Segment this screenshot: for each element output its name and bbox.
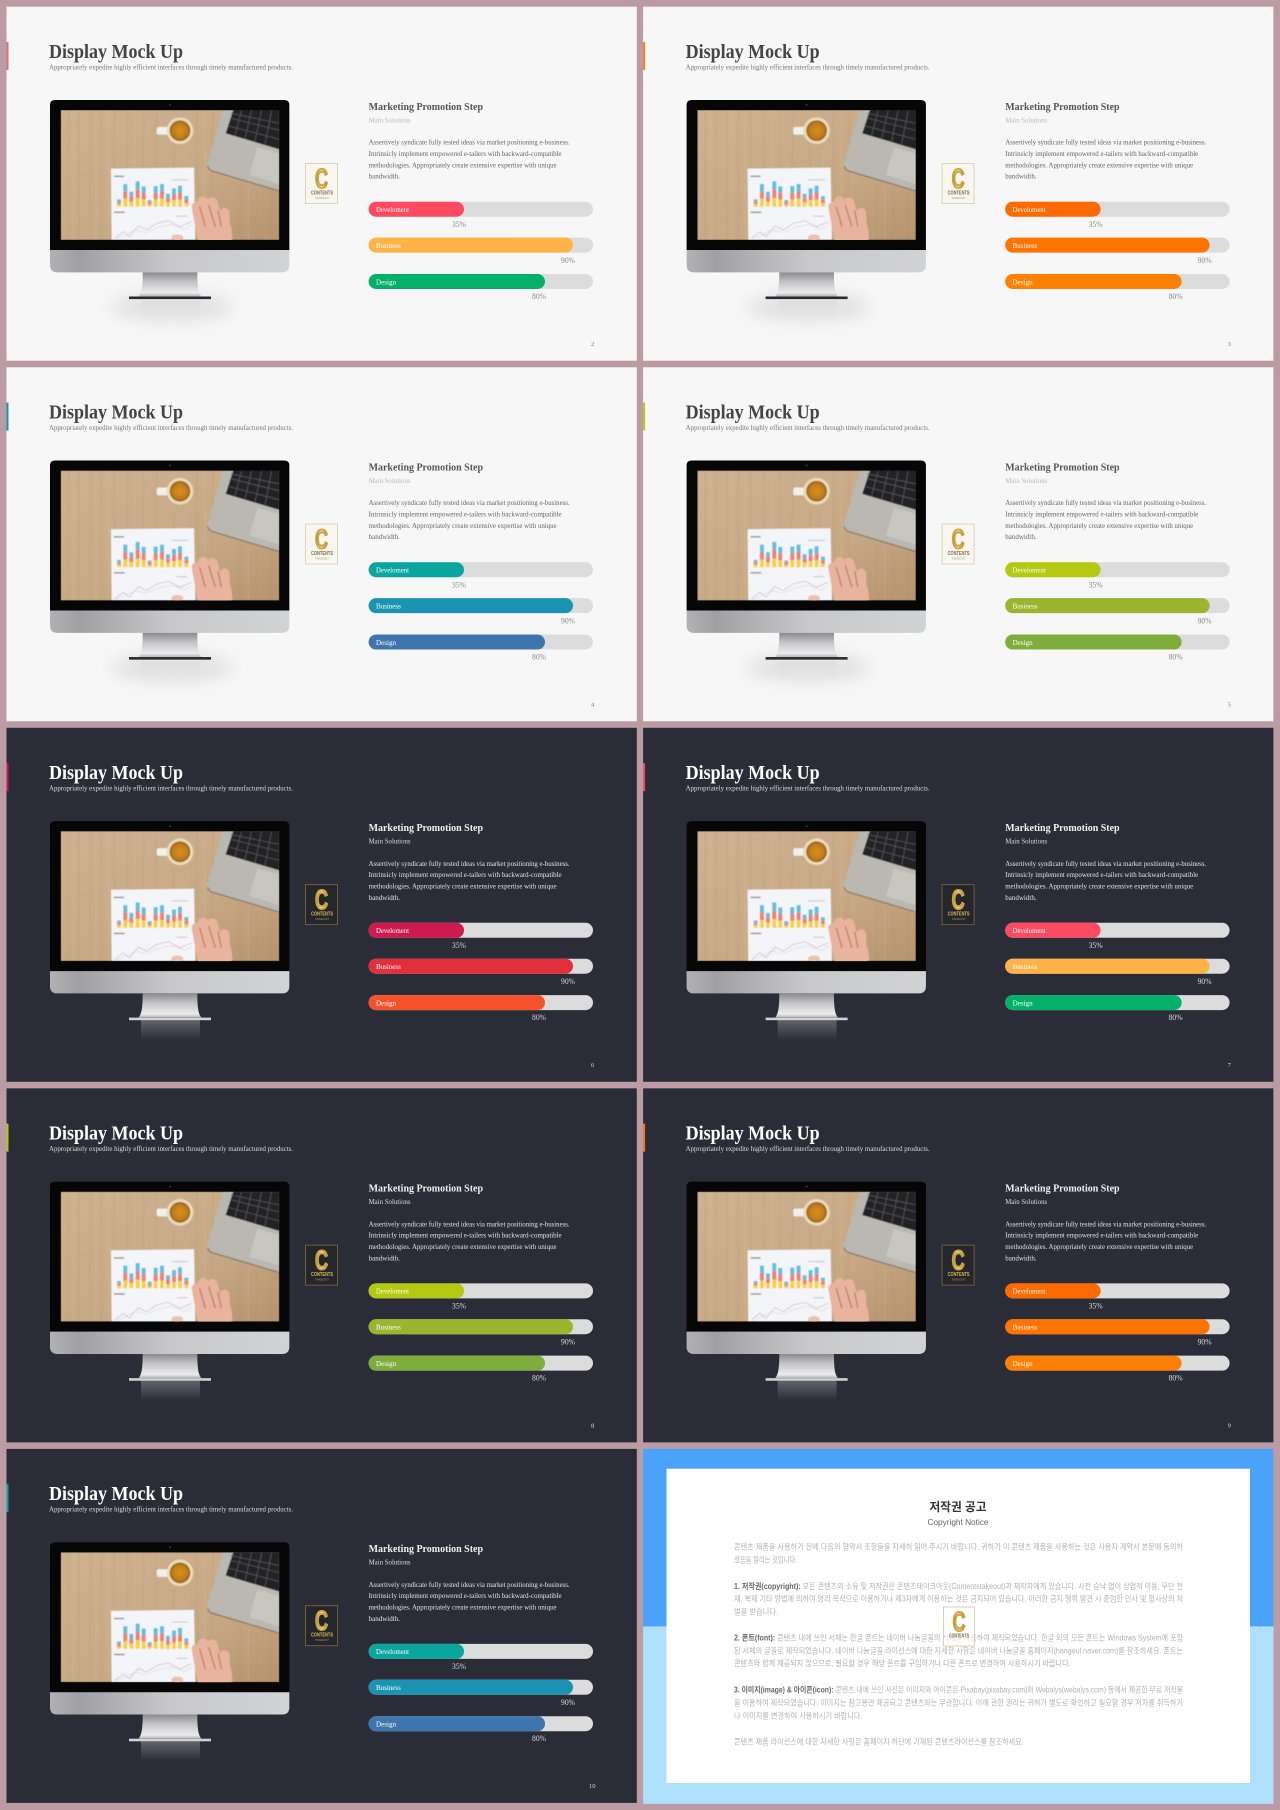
- body text: Assertively syndicate fully tested ideas via market positioning e-business.: [1005, 1219, 1206, 1228]
- sub heading: Main Solutions: [369, 837, 411, 846]
- progress bar: design 80%: 80%: [532, 653, 546, 662]
- body text: Intrinsicly implement empowered e-tailers with backward-compatible: [1005, 149, 1199, 158]
- accent bar: [6, 403, 8, 431]
- progress bar: design 80%: [369, 635, 593, 662]
- progress bar: design 80%: 80%: [532, 1734, 546, 1743]
- notice body text: 2. 폰트(font): 콘텐츠 내에 쓰인 서체는 한글 폰트는 네이버 나눔글꼴의 서체를 사용하여 제작되었습니다. 한글 외의 모든 폰트는 Windows System에 포함: [734, 1633, 1183, 1643]
- progress bar: business 90%: Business: [1013, 241, 1037, 250]
- body text: bandwidth.: [369, 532, 400, 541]
- progress bar: business 90%: 90%: [561, 1698, 575, 1707]
- body text: Assertively syndicate fully tested ideas via market positioning e-business.: [369, 1219, 570, 1228]
- progress bar: design 80%: Design: [1013, 638, 1033, 647]
- progress bar: development 35%: Develoment: [1013, 566, 1046, 575]
- heading: Marketing Promotion Step: [1005, 463, 1120, 474]
- body text: Assertively syndicate fully tested ideas via market positioning e-business.: [1005, 138, 1206, 147]
- progress bar: development 35%: 35%: [452, 1662, 466, 1671]
- monitor mockup: [50, 821, 289, 1040]
- subtitle: Appropriately expedite highly efficient interfaces through timely manufactured products.: [686, 1145, 930, 1153]
- heading: Marketing Promotion Step: [369, 823, 483, 834]
- body text: Intrinsicly implement empowered e-tailers with backward-compatible: [369, 1591, 562, 1600]
- progress bar: development 35%: Develoment: [1013, 926, 1046, 935]
- subtitle: Appropriately expedite highly efficient interfaces through timely manufactured products.: [49, 1506, 293, 1514]
- progress bar: business 90%: [1005, 1319, 1230, 1347]
- page number: 5: [1228, 702, 1231, 709]
- logo badge: [306, 1245, 338, 1285]
- body text: bandwidth.: [369, 1253, 400, 1262]
- body text: Intrinsicly implement empowered e-tailers with backward-compatible: [369, 1231, 562, 1240]
- progress bar: development 35%: Develoment: [376, 1287, 410, 1296]
- monitor mockup: [50, 1542, 289, 1761]
- accent bar: [643, 1124, 645, 1152]
- body text: [369, 1219, 570, 1262]
- progress bar: business 90%: [369, 238, 593, 265]
- logo badge: [942, 1245, 974, 1285]
- progress bar: design 80%: Design: [376, 1359, 396, 1368]
- body text: methodologies. Appropriately create extensive expertise with unique: [1005, 1242, 1194, 1251]
- body text: methodologies. Appropriately create extensive expertise with unique: [369, 882, 557, 891]
- sub heading: Main Solutions: [1005, 1197, 1047, 1206]
- progress bar: design 80%: [369, 1356, 593, 1383]
- accent bar: [6, 1124, 8, 1152]
- progress bar: business 90%: [369, 959, 593, 986]
- progress bar: business 90%: 90%: [561, 977, 575, 986]
- notice body text: 된 서체의 글꼴로 제작되었습니다. 네이버 나눔글꼴 라이선스에 대한 자세한 사항은 네이버 나눔글꼴 홈페이지(hangeul.naver.com)를 참조하세요. 폰트는: [734, 1646, 1183, 1656]
- progress bar: business 90%: Business: [1013, 962, 1037, 971]
- body text: methodologies. Appropriately create extensive expertise with unique: [369, 521, 557, 530]
- progress bar: development 35%: 35%: [452, 941, 466, 950]
- progress bar: business 90%: Business: [1013, 602, 1037, 611]
- accent bar: [6, 1484, 8, 1512]
- progress bar: business 90%: 90%: [561, 617, 575, 626]
- heading: Marketing Promotion Step: [369, 463, 483, 474]
- notice body text: 나 이미지를 변경하여 사용하시기 바랍니다.: [734, 1711, 862, 1721]
- sub heading: Main Solutions: [369, 476, 411, 485]
- monitor mockup: [50, 1182, 289, 1401]
- notice body text: 재, 복제 기타 방법에 의하여 영리 목적으로 이용하거나 제3자에게 이용하는 것은 금지되어 있습니다. 이러한 금지 행위 발견 시 준엄한 민사 및 형사상의 처: [734, 1594, 1183, 1604]
- heading: Marketing Promotion Step: [1005, 823, 1120, 834]
- heading: Marketing Promotion Step: [1005, 1184, 1120, 1195]
- logo badge: [944, 1606, 974, 1646]
- panel: copyright notice: [643, 1449, 1274, 1804]
- sub heading: Main Solutions: [369, 116, 411, 124]
- progress bar: development 35%: [1005, 923, 1230, 950]
- progress bar: design 80%: [369, 1716, 593, 1743]
- accent bar: [643, 42, 645, 70]
- notice body text: 벌을 받습니다.: [734, 1607, 778, 1617]
- progress bar: development 35%: Develoment: [376, 926, 410, 935]
- panel: slide 3: [643, 7, 1273, 361]
- panel: slide 10: [6, 1449, 637, 1803]
- page number: 3: [1228, 341, 1231, 348]
- accent bar: [6, 763, 8, 791]
- body text: bandwidth.: [369, 1614, 400, 1623]
- logo badge: [306, 884, 338, 925]
- sub heading: Main Solutions: [369, 1197, 411, 1206]
- panel: slide 4: [6, 367, 637, 721]
- progress bar: development 35%: 35%: [1089, 581, 1103, 590]
- accent bar: [643, 763, 645, 791]
- panel: slide 8: [6, 1088, 637, 1442]
- notice body text: 1. 저작권(copyright): 모든 콘텐츠의 소유 및 저작권은 콘텐츠테이크아웃(Contentstakeout)과 제작자에게 있습니다. 사전 승낙 없이 상업적 이용, 무단 전: [734, 1581, 1183, 1591]
- title: Display Mock Up: [686, 762, 820, 784]
- title: Display Mock Up: [49, 1483, 183, 1505]
- progress bar: design 80%: 80%: [1169, 1374, 1183, 1383]
- monitor mockup: [687, 821, 926, 1040]
- progress bar: design 80%: 80%: [532, 1013, 546, 1022]
- subtitle: Appropriately expedite highly efficient interfaces through timely manufactured products.: [49, 424, 293, 432]
- notice subtitle: Copyright Notice: [928, 1517, 989, 1527]
- sub heading: Main Solutions: [1005, 116, 1047, 124]
- monitor mockup: [50, 461, 289, 684]
- body text: Assertively syndicate fully tested ideas via market positioning e-business.: [369, 138, 570, 147]
- notice body text: 3. 이미지(image) & 아이콘(icon): 콘텐츠 내에 쓰인 사진은 이미지와 아이콘은 Pixabay(pixabay.com)와 Webalys(webalys.com) 등에서 제공한 무료 저작물: [734, 1685, 1183, 1695]
- progress bar: design 80%: Design: [376, 1720, 396, 1729]
- body text: Assertively syndicate fully tested ideas via market positioning e-business.: [1005, 859, 1206, 868]
- notice body text: [734, 1542, 1183, 1747]
- body text: Intrinsicly implement empowered e-tailers with backward-compatible: [369, 870, 562, 879]
- progress bar: business 90%: 90%: [1198, 256, 1212, 265]
- progress bar: design 80%: Design: [376, 278, 396, 286]
- progress bar: development 35%: 35%: [1089, 220, 1103, 229]
- body text: Assertively syndicate fully tested ideas via market positioning e-business.: [369, 498, 570, 507]
- progress bar: development 35%: [1005, 1283, 1230, 1311]
- body text: [369, 498, 570, 541]
- progress bar: business 90%: 90%: [561, 256, 575, 265]
- body text: bandwidth.: [1005, 532, 1037, 541]
- subtitle: Appropriately expedite highly efficient interfaces through timely manufactured products.: [49, 64, 293, 72]
- sub heading: Main Solutions: [1005, 837, 1047, 846]
- logo badge: [306, 524, 338, 564]
- progress bar: design 80%: [369, 995, 593, 1022]
- sub heading: Main Solutions: [369, 1558, 411, 1567]
- progress bar: design 80%: Design: [1013, 1359, 1033, 1368]
- progress bar: development 35%: 35%: [452, 220, 466, 229]
- title: Display Mock Up: [686, 402, 820, 424]
- page number: 4: [591, 702, 595, 709]
- progress bar: design 80%: Design: [376, 999, 396, 1008]
- body text: methodologies. Appropriately create extensive expertise with unique: [369, 160, 557, 170]
- body text: Intrinsicly implement empowered e-tailers with backward-compatible: [369, 510, 562, 519]
- logo badge: [942, 884, 974, 925]
- body text: bandwidth.: [369, 172, 400, 181]
- body text: Intrinsicly implement empowered e-tailers with backward-compatible: [369, 149, 562, 158]
- body text: [369, 859, 570, 902]
- body text: [1005, 138, 1206, 181]
- progress bar: development 35%: Develoment: [376, 205, 410, 214]
- sub heading: Main Solutions: [1005, 476, 1047, 485]
- title: Display Mock Up: [686, 1123, 820, 1145]
- progress bar: development 35%: [369, 562, 593, 590]
- panel: slide 2: [6, 7, 637, 361]
- body text: Intrinsicly implement empowered e-tailers with backward-compatible: [1005, 870, 1199, 879]
- progress bar: development 35%: [369, 923, 593, 950]
- monitor mockup: [687, 1182, 926, 1401]
- progress bar: business 90%: [1005, 959, 1230, 986]
- heading: Marketing Promotion Step: [369, 1184, 483, 1195]
- logo badge: C: [952, 1606, 966, 1637]
- body text: Intrinsicly implement empowered e-tailers with backward-compatible: [1005, 510, 1199, 519]
- progress bar: development 35%: Develoment: [1013, 205, 1046, 214]
- progress bar: development 35%: [369, 1283, 593, 1311]
- progress bar: business 90%: [369, 1680, 593, 1707]
- white notice card: [666, 1469, 1250, 1783]
- progress bar: design 80%: [369, 274, 593, 301]
- notice title: 저작권 공고: [930, 1499, 986, 1514]
- progress bar: business 90%: Business: [376, 1323, 401, 1332]
- body text: Intrinsicly implement empowered e-tailers with backward-compatible: [1005, 1231, 1199, 1240]
- notice body text: 콘텐츠 제품을 사용하기 전에 다음의 협약서 조항들을 자세히 읽어 주시기 바랍니다. 귀하가 이 콘텐츠 제품을 사용하는 것은 사용자 계약서 본문에 동의하: [734, 1542, 1183, 1552]
- page number: 6: [591, 1062, 595, 1069]
- panel: slide 6: [6, 728, 637, 1082]
- progress bar: business 90%: [369, 1319, 593, 1347]
- page number: 9: [1228, 1423, 1231, 1430]
- body text: bandwidth.: [1005, 893, 1037, 902]
- progress bar: business 90%: 90%: [561, 1338, 575, 1347]
- logo badge: CONTENTS: [949, 1634, 969, 1640]
- notice body text: 을 이용하여 제작되었습니다. 이미지는 참고용만 제공되고 콘텐츠와는 무관합니다. 이에 관한 권리는 귀하가 별도로 확인하고 필요할 경우 저자를 취득하거: [734, 1698, 1183, 1708]
- monitor mockup: [687, 100, 926, 323]
- progress bar: business 90%: Business: [376, 962, 401, 971]
- notice body text: 셨음을 알리는 것입니다.: [734, 1555, 797, 1565]
- progress bar: business 90%: Business: [376, 1683, 401, 1692]
- page number: 10: [589, 1783, 596, 1790]
- body text: [1005, 1219, 1206, 1262]
- progress bar: development 35%: 35%: [1089, 1302, 1103, 1311]
- progress bar: business 90%: Business: [1013, 1323, 1037, 1332]
- body text: [369, 1580, 570, 1623]
- progress bar: design 80%: 80%: [1169, 292, 1183, 301]
- body text: [1005, 498, 1206, 541]
- notice body text: 콘텐츠와 함께 제공되지 않으므로, 필요할 경우 해당 폰트를 구입하거나 다른 폰트로 변경하여 사용하시기 바랍니다.: [734, 1658, 1071, 1668]
- accent bar: [6, 42, 8, 70]
- panel: slide 5: [643, 367, 1273, 721]
- page number: 7: [1228, 1062, 1232, 1069]
- body text: methodologies. Appropriately create extensive expertise with unique: [369, 1242, 557, 1251]
- body text: Assertively syndicate fully tested ideas via market positioning e-business.: [1005, 498, 1206, 507]
- progress bar: design 80%: Design: [1013, 278, 1033, 286]
- progress bar: design 80%: [1005, 995, 1230, 1022]
- progress bar: design 80%: 80%: [532, 292, 546, 301]
- progress bar: business 90%: Business: [376, 602, 401, 611]
- body text: bandwidth.: [1005, 172, 1037, 181]
- progress bar: business 90%: 90%: [1198, 977, 1212, 986]
- heading: Marketing Promotion Step: [369, 1544, 483, 1555]
- subtitle: Appropriately expedite highly efficient interfaces through timely manufactured products.: [686, 785, 930, 793]
- progress bar: business 90%: Business: [376, 241, 401, 250]
- accent bar: [643, 403, 645, 431]
- logo badge: [306, 1605, 338, 1646]
- body text: Assertively syndicate fully tested ideas via market positioning e-business.: [369, 859, 570, 868]
- progress bar: design 80%: [1005, 274, 1230, 301]
- progress bar: design 80%: [1005, 635, 1230, 662]
- logo badge: [942, 524, 974, 564]
- progress bar: business 90%: [369, 598, 593, 626]
- monitor mockup: [687, 461, 926, 684]
- progress bar: development 35%: [1005, 562, 1230, 590]
- progress bar: development 35%: Develoment: [376, 1647, 410, 1656]
- progress bar: development 35%: 35%: [1089, 941, 1103, 950]
- body text: [369, 138, 570, 181]
- heading: Marketing Promotion Step: [369, 102, 483, 113]
- page number: 8: [591, 1423, 594, 1430]
- subtitle: Appropriately expedite highly efficient interfaces through timely manufactured products.: [49, 785, 293, 793]
- progress bar: business 90%: [1005, 238, 1230, 265]
- body text: methodologies. Appropriately create extensive expertise with unique: [1005, 160, 1194, 170]
- body text: bandwidth.: [1005, 1253, 1037, 1262]
- panel: slide 9: [643, 1088, 1273, 1442]
- body text: methodologies. Appropriately create extensive expertise with unique: [1005, 882, 1194, 891]
- title: Display Mock Up: [49, 1123, 183, 1145]
- subtitle: Appropriately expedite highly efficient interfaces through timely manufactured products.: [686, 64, 930, 72]
- title: Display Mock Up: [49, 402, 183, 424]
- progress bar: design 80%: 80%: [1169, 1013, 1183, 1022]
- logo badge: [306, 163, 338, 204]
- panel: slide 7: [643, 728, 1273, 1082]
- progress bar: development 35%: [369, 202, 593, 229]
- body text: methodologies. Appropriately create extensive expertise with unique: [1005, 521, 1194, 530]
- progress bar: design 80%: 80%: [1169, 653, 1183, 662]
- title: Display Mock Up: [686, 41, 820, 63]
- progress bar: design 80%: 80%: [532, 1374, 546, 1383]
- title: Display Mock Up: [49, 762, 183, 784]
- body text: Assertively syndicate fully tested ideas via market positioning e-business.: [369, 1580, 570, 1589]
- heading: Marketing Promotion Step: [1005, 102, 1120, 113]
- progress bar: design 80%: [1005, 1356, 1230, 1383]
- progress bar: development 35%: [1005, 202, 1230, 229]
- page number: 2: [591, 341, 594, 348]
- progress bar: design 80%: Design: [1013, 999, 1033, 1008]
- subtitle: Appropriately expedite highly efficient interfaces through timely manufactured products.: [49, 1145, 293, 1153]
- progress bar: development 35%: [369, 1644, 593, 1671]
- progress bar: business 90%: 90%: [1198, 1338, 1212, 1347]
- notice body text: 콘텐츠 제품 라이선스에 대한 자세한 사항은 홈페이지 하단에 기재된 콘텐츠라이선스를 참조하세요.: [734, 1737, 1024, 1747]
- progress bar: development 35%: Develoment: [376, 566, 410, 575]
- logo badge: [942, 163, 974, 204]
- body text: [1005, 859, 1206, 902]
- progress bar: development 35%: Develoment: [1013, 1287, 1046, 1296]
- progress bar: business 90%: [1005, 598, 1230, 626]
- progress bar: development 35%: 35%: [452, 581, 466, 590]
- monitor mockup: [50, 100, 289, 323]
- title: Display Mock Up: [49, 41, 183, 63]
- progress bar: development 35%: 35%: [452, 1302, 466, 1311]
- body text: bandwidth.: [369, 893, 400, 902]
- body text: methodologies. Appropriately create extensive expertise with unique: [369, 1603, 557, 1612]
- progress bar: business 90%: 90%: [1198, 617, 1212, 626]
- subtitle: Appropriately expedite highly efficient interfaces through timely manufactured products.: [686, 424, 930, 432]
- progress bar: design 80%: Design: [376, 638, 396, 647]
